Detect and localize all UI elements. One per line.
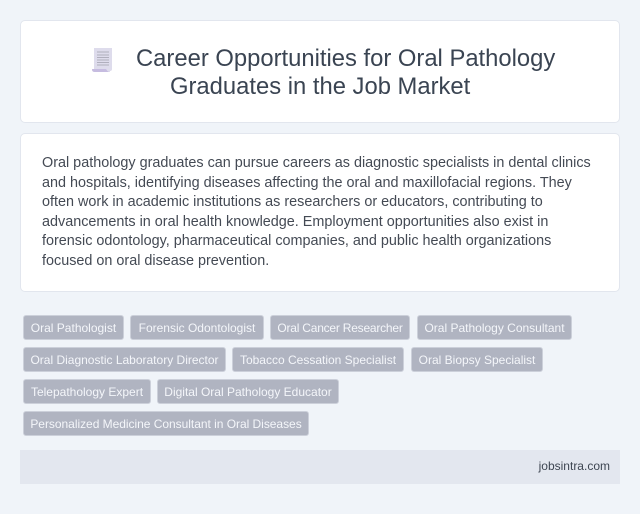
tag: Personalized Medicine Consultant in Oral Diseases bbox=[30, 417, 302, 431]
tag bbox=[23, 411, 309, 436]
panel: title card bbox=[20, 20, 620, 123]
text block: Oral pathology graduates can pursue careers as diagnostic specialists in dental clinics bbox=[42, 155, 591, 171]
tag bbox=[411, 347, 543, 372]
footer source text: jobsintra.com bbox=[539, 459, 610, 473]
text block: advancements in oral health knowledge. Employment opportunities also exist in bbox=[42, 214, 548, 230]
tag: Digital Oral Pathology Educator bbox=[164, 385, 332, 399]
text block bbox=[42, 155, 591, 268]
text block: and hospitals, identifying diseases affecting the oral and maxillofacial regions. They bbox=[42, 174, 572, 190]
tag: Oral Pathology Consultant bbox=[424, 321, 565, 335]
icon: document scroll bbox=[92, 48, 112, 72]
tag bbox=[23, 347, 226, 372]
tag: Oral Cancer Researcher bbox=[277, 321, 403, 335]
tag: Tobacco Cessation Specialist bbox=[240, 353, 396, 367]
tag: Oral Pathologist bbox=[31, 321, 116, 335]
heading line 1: Career Opportunities for Oral Pathology bbox=[136, 45, 555, 72]
tag bbox=[232, 347, 404, 372]
tag bbox=[157, 379, 339, 404]
tag: Forensic Odontologist bbox=[139, 321, 255, 335]
tag bbox=[270, 315, 410, 340]
panel: description bbox=[20, 133, 620, 292]
heading line 2: Graduates in the Job Market bbox=[170, 73, 470, 100]
tag bbox=[23, 379, 151, 404]
tag: Telepathology Expert bbox=[31, 385, 143, 399]
footer bar bbox=[20, 450, 620, 484]
text block: forensic odontology, pharmaceutical companies, and public health organizations bbox=[42, 233, 551, 249]
text block: often work in academic institutions as researchers or educators, contributing to bbox=[42, 194, 543, 210]
text block: focused on oral disease prevention. bbox=[42, 252, 269, 268]
tag bbox=[23, 315, 124, 340]
tag bbox=[130, 315, 264, 340]
tag: Oral Biopsy Specialist bbox=[419, 353, 535, 367]
tags bbox=[23, 315, 572, 436]
tag bbox=[417, 315, 572, 340]
tag: Oral Diagnostic Laboratory Director bbox=[30, 353, 219, 367]
